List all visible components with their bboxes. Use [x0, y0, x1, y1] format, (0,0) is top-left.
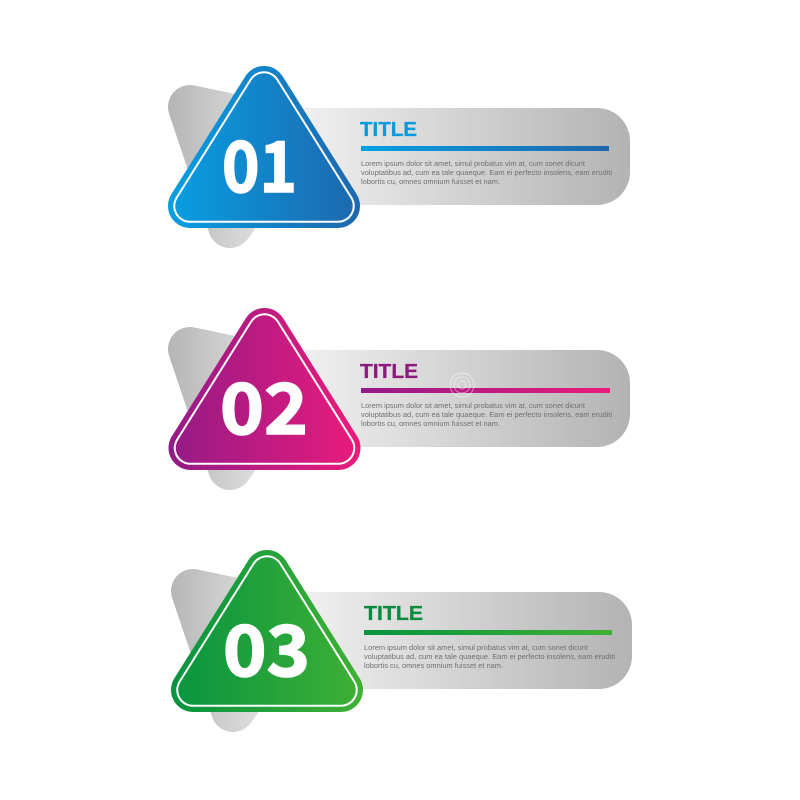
body text 02: Lorem ipsum dolor sit amet, simul probatus vim at, cum sonet dicunt	[361, 401, 586, 410]
body text 03: Lorem ipsum dolor sit amet, simul probatus vim at, cum sonet dicunt	[364, 643, 589, 652]
body text 03: voluptatibus ad, cum ea tale quaeque. Eam ei perfecto insolens, eam eruditi	[364, 652, 615, 661]
title 03: TITLE	[364, 603, 423, 625]
panel: item 03	[193, 572, 632, 710]
body text 01	[361, 159, 612, 186]
green triangle badge 03	[193, 572, 341, 690]
grey back triangle 03	[193, 591, 303, 710]
title 02: TITLE	[360, 361, 418, 383]
watermark swirl	[450, 373, 474, 397]
number 02: 02	[220, 354, 308, 455]
magenta triangle badge 02	[190, 330, 338, 448]
grey text bar 03	[303, 592, 632, 689]
title 01: TITLE	[360, 119, 417, 141]
body text 02	[361, 401, 612, 428]
body text 01: Lorem ipsum dolor sit amet, simul probatus vim at, cum sonet dicunt	[361, 159, 586, 168]
grey back triangle 02	[190, 349, 300, 468]
body text 03	[364, 643, 615, 670]
grey text bar 02	[300, 350, 630, 447]
number 01: 01	[222, 112, 297, 213]
body text 02: voluptatibus ad, cum ea tale quaeque. Eam ei perfecto insolens, eam eruditi	[361, 410, 612, 419]
number 03: 03	[223, 596, 310, 697]
blue triangle badge 01	[190, 88, 338, 206]
body text 02: lobortis cu, omnes omnium fuisset et nam.	[361, 419, 500, 428]
grey back triangle 01	[190, 107, 300, 226]
title underline 01	[361, 146, 609, 151]
title underline 02	[361, 388, 610, 393]
body text 03: lobortis cu, omnes omnium fuisset et nam.	[364, 661, 503, 670]
panel: item 01	[190, 88, 630, 226]
body text 01: voluptatibus ad, cum ea tale quaeque. Eam ei perfecto insolens, eam eruditi	[361, 168, 612, 177]
body text 01: lobortis cu, omnes omnium fuisset et nam.	[361, 177, 500, 186]
grey text bar 01	[300, 108, 630, 205]
panel: item 02	[190, 330, 630, 468]
title underline 03	[364, 630, 612, 635]
